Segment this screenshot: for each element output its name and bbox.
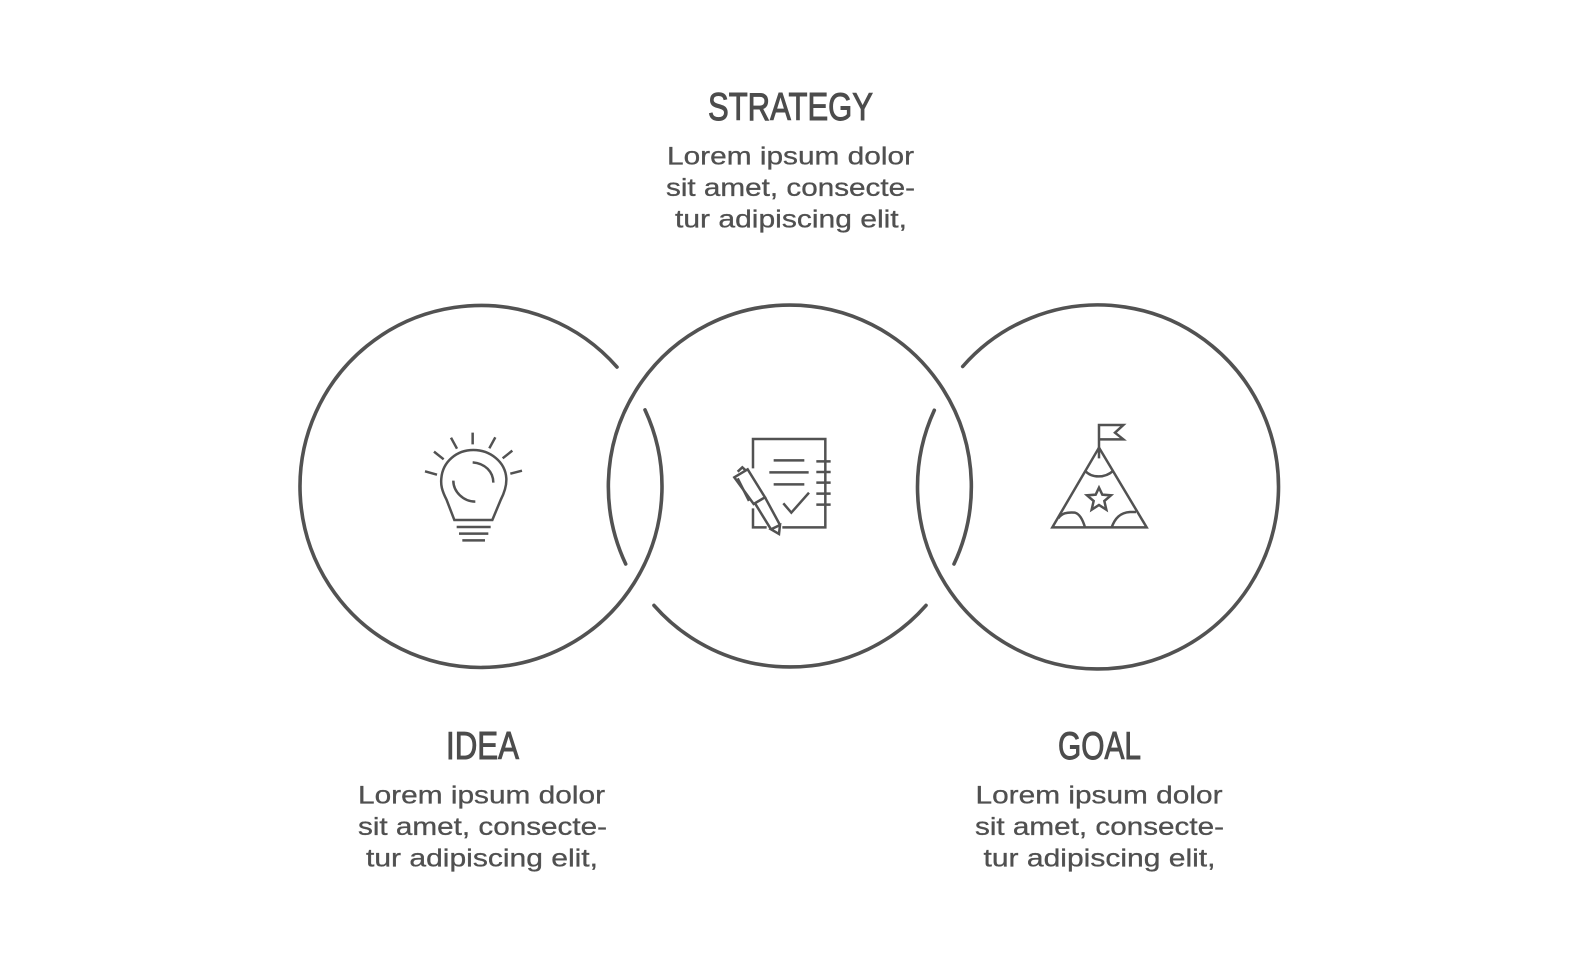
text block: idea [358, 725, 607, 872]
heading: idea: IDEA [446, 725, 519, 768]
icon: notebook and pen [734, 439, 831, 534]
ring: strategy circle lower arc [654, 605, 926, 667]
body line 3: tur adipiscing elit, [366, 844, 598, 872]
body line 1: Lorem ipsum dolor [976, 782, 1222, 810]
heading: goal: GOAL [1058, 725, 1141, 768]
heading: strategy: STRATEGY [708, 86, 873, 129]
body line 1: Lorem ipsum dolor [358, 782, 605, 810]
text block: strategy [666, 86, 915, 234]
text block: goal [975, 725, 1224, 872]
icon: tent with flag [1052, 425, 1147, 527]
body line 2: sit amet, consecte- [358, 813, 607, 841]
ring: strategy circle upper arc [608, 305, 971, 564]
body line 3: tur adipiscing elit, [984, 844, 1216, 872]
icon: light bulb [425, 433, 522, 540]
body line 1: Lorem ipsum dolor [667, 142, 914, 170]
ring: goal circle [918, 305, 1279, 669]
body line 2: sit amet, consecte- [666, 174, 915, 202]
body line 3: tur adipiscing elit, [675, 206, 907, 234]
body line 2: sit amet, consecte- [975, 813, 1224, 841]
ring: idea circle [300, 305, 662, 667]
